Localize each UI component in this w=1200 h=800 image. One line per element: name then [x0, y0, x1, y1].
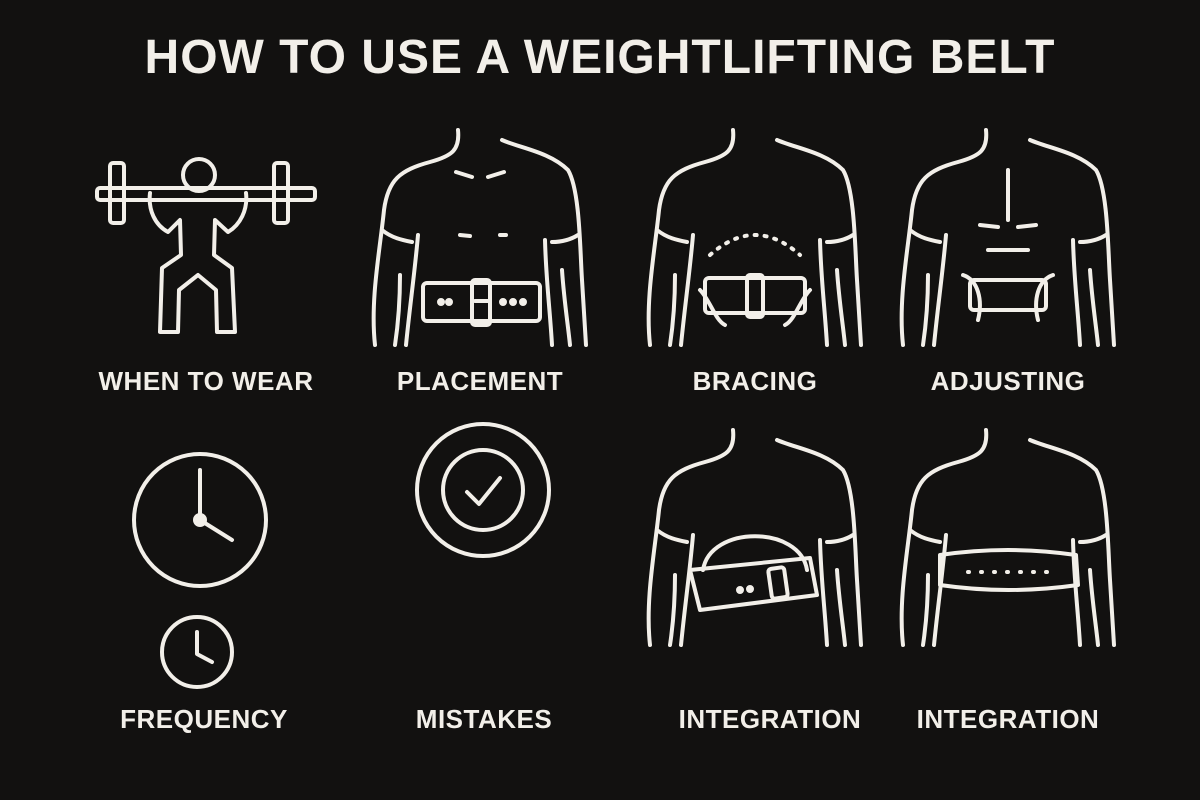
label: integration 2: INTEGRATION	[917, 704, 1099, 734]
title: HOW TO USE A WEIGHTLIFTING BELT	[145, 31, 1055, 84]
label: adjusting: ADJUSTING	[931, 366, 1085, 396]
icon: big clock	[134, 454, 266, 586]
icon: integration torso 1	[649, 430, 861, 645]
label: placement: PLACEMENT	[397, 366, 563, 396]
label: integration 1: INTEGRATION	[679, 704, 861, 734]
icon: adjusting torso	[902, 130, 1114, 345]
label: frequency: FREQUENCY	[120, 704, 288, 734]
label: when to wear: WHEN TO WEAR	[99, 366, 313, 396]
icon: placement torso	[374, 130, 586, 345]
label: bracing: BRACING	[693, 366, 817, 396]
icon: checkmark circle	[417, 424, 549, 556]
icon: lifter with barbell	[97, 159, 315, 332]
label: mistakes: MISTAKES	[416, 704, 552, 734]
icon: bracing torso	[649, 130, 861, 345]
icon: integration torso 2	[902, 430, 1114, 645]
icon: small clock	[162, 617, 232, 687]
